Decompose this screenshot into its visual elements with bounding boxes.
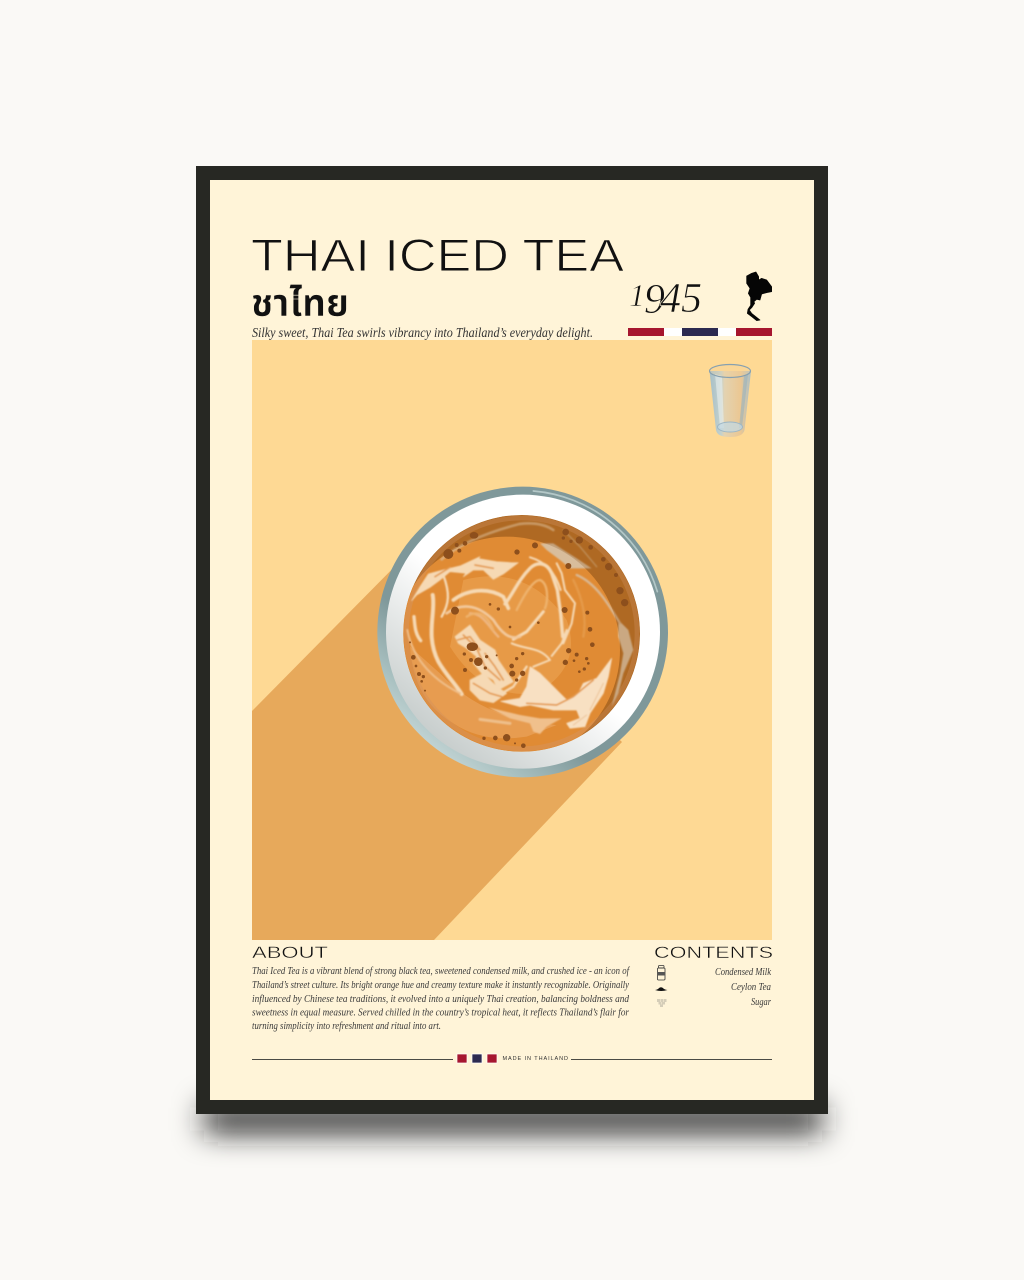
upper left curl <box>412 557 480 601</box>
about paragraph: turning simplicity into refreshment and ritual into art. <box>252 1021 441 1032</box>
big lower right swirl <box>501 658 612 728</box>
orange veins inside milk <box>435 565 603 725</box>
made in thailand label: MADE IN THAILAND <box>502 1056 568 1062</box>
cup of thai tea, top view <box>370 480 675 785</box>
year: 4 <box>660 276 681 322</box>
icon: map of Thailand <box>747 272 772 321</box>
lower streak <box>488 707 562 734</box>
upper centre curl <box>463 558 518 579</box>
long cast shadow <box>252 549 622 940</box>
shaded crescent over milk <box>413 515 640 736</box>
contents list <box>715 967 771 1008</box>
milk strands <box>407 523 620 723</box>
thai title: ชาไทย <box>251 283 349 325</box>
illustration panel <box>252 340 772 940</box>
about paragraph: Thailand’s street culture. Its bright orange hue and creamy texture make it instantly recognizable. Originally <box>252 980 629 991</box>
about paragraph: influenced by Chinese tea traditions, it evolved into a uniquely Thai creation, balancing boldness and <box>252 994 630 1005</box>
milk swirls <box>407 523 633 734</box>
title: THAI ICED TEA <box>251 230 624 281</box>
shaded milk band top <box>540 543 592 568</box>
white saucer interior <box>386 495 660 769</box>
contents list: Condensed Milk <box>715 967 771 978</box>
glass rim <box>377 487 668 777</box>
contents heading: CONTENTS <box>654 944 773 962</box>
about paragraph: sweetness in equal measure. Served chilled in the country’s tropical heat, it reflects Thailand’s flair for <box>252 1008 629 1018</box>
centre marble <box>455 625 513 690</box>
about heading: ABOUT <box>252 944 328 962</box>
year: 1 <box>629 277 645 313</box>
tea surface <box>403 515 640 752</box>
year: 5 <box>681 276 702 322</box>
lit area <box>393 537 620 763</box>
icon: tea leaves <box>655 987 668 991</box>
year: 9 <box>644 277 665 323</box>
footer flag squares <box>457 1054 497 1063</box>
about paragraph <box>252 966 630 1032</box>
right edge milk <box>612 620 633 707</box>
icon: empty glass <box>710 364 751 437</box>
icon: condensed milk can <box>658 966 665 980</box>
contents list: Sugar <box>751 997 771 1008</box>
tagline: Silky sweet, Thai Tea swirls vibrancy into Thailand’s everyday delight. <box>252 325 593 340</box>
frame drop shadow <box>204 1106 822 1132</box>
rim highlights <box>533 491 657 592</box>
flag colour bars <box>628 328 772 336</box>
contents list: Ceylon Tea <box>731 982 771 993</box>
pale orange arch veins <box>467 580 585 637</box>
about paragraph: Thai Iced Tea is a vibrant blend of strong black tea, sweetened condensed milk, and crushed ice - an icon of <box>252 966 630 977</box>
poster frame <box>196 166 828 1114</box>
footer rule <box>252 1059 772 1060</box>
bubbles <box>409 529 628 748</box>
icon: sugar cubes <box>657 999 666 1007</box>
